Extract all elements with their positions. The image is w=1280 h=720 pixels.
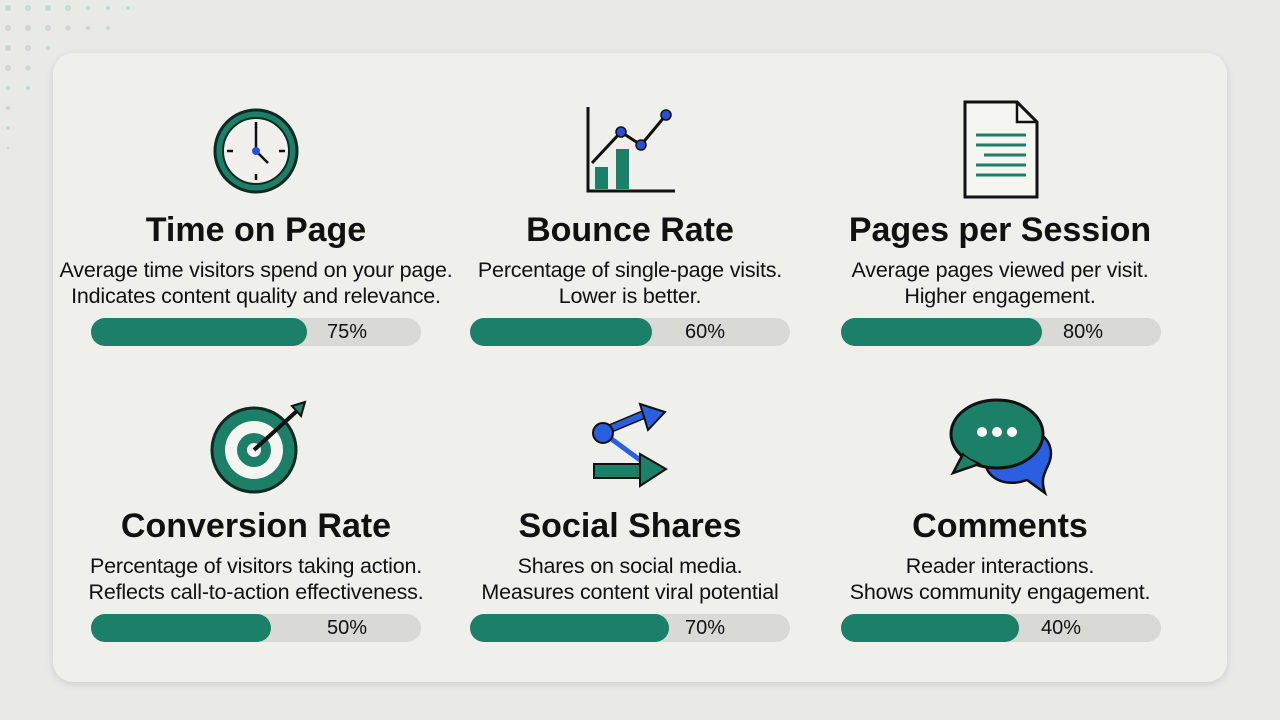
conversion rate description: Percentage of visitors taking action. xyxy=(90,554,422,578)
time on page description: Average time visitors spend on your page. xyxy=(60,258,452,282)
bar: 50%: 50% xyxy=(327,617,367,639)
bar: 60%: 60% xyxy=(685,321,725,343)
bounce rate description: Percentage of single-page visits. xyxy=(478,258,782,282)
icon: document xyxy=(964,100,1038,198)
bounce rate description: Lower is better. xyxy=(559,284,701,308)
social shares description xyxy=(481,554,779,604)
icon: comments xyxy=(950,398,1052,496)
bar: 40% xyxy=(841,614,1161,642)
social shares description: Measures content viral potential xyxy=(481,580,779,604)
bar: 80%: 80% xyxy=(1063,321,1103,343)
pages per session description: Average pages viewed per visit. xyxy=(852,258,1148,282)
social shares title: Social Shares xyxy=(518,507,742,545)
icon: target xyxy=(210,400,306,494)
bar: 50% xyxy=(91,614,421,642)
icon: clock xyxy=(214,108,298,194)
bar: 80% xyxy=(841,318,1161,346)
bar: 60% xyxy=(470,318,790,346)
social shares description: Shares on social media. xyxy=(518,554,742,578)
bar: 70% xyxy=(470,614,790,642)
bounce rate title: Bounce Rate xyxy=(526,211,734,249)
conversion rate title: Conversion Rate xyxy=(121,507,391,545)
pages per session description xyxy=(852,258,1148,308)
bar: 75%: 75% xyxy=(327,321,367,343)
icon: share arrows xyxy=(592,402,668,488)
time on page description: Indicates content quality and relevance. xyxy=(71,284,441,308)
bar: 70%: 70% xyxy=(685,617,725,639)
bar: 75% xyxy=(91,318,421,346)
pages per session description: Higher engagement. xyxy=(904,284,1096,308)
conversion rate description xyxy=(89,554,423,604)
comments description: Reader interactions. xyxy=(906,554,1094,578)
pages per session title: Pages per Session xyxy=(849,211,1151,249)
comments description xyxy=(850,554,1150,604)
comments title: Comments xyxy=(912,507,1088,545)
background dots xyxy=(5,5,130,150)
comments description: Shows community engagement. xyxy=(850,580,1150,604)
bounce rate description xyxy=(478,258,782,308)
bar: 40%: 40% xyxy=(1041,617,1081,639)
time on page description xyxy=(60,258,452,308)
conversion rate description: Reflects call-to-action effectiveness. xyxy=(89,580,423,604)
time on page title: Time on Page xyxy=(146,211,366,249)
icon: chart xyxy=(586,107,675,192)
